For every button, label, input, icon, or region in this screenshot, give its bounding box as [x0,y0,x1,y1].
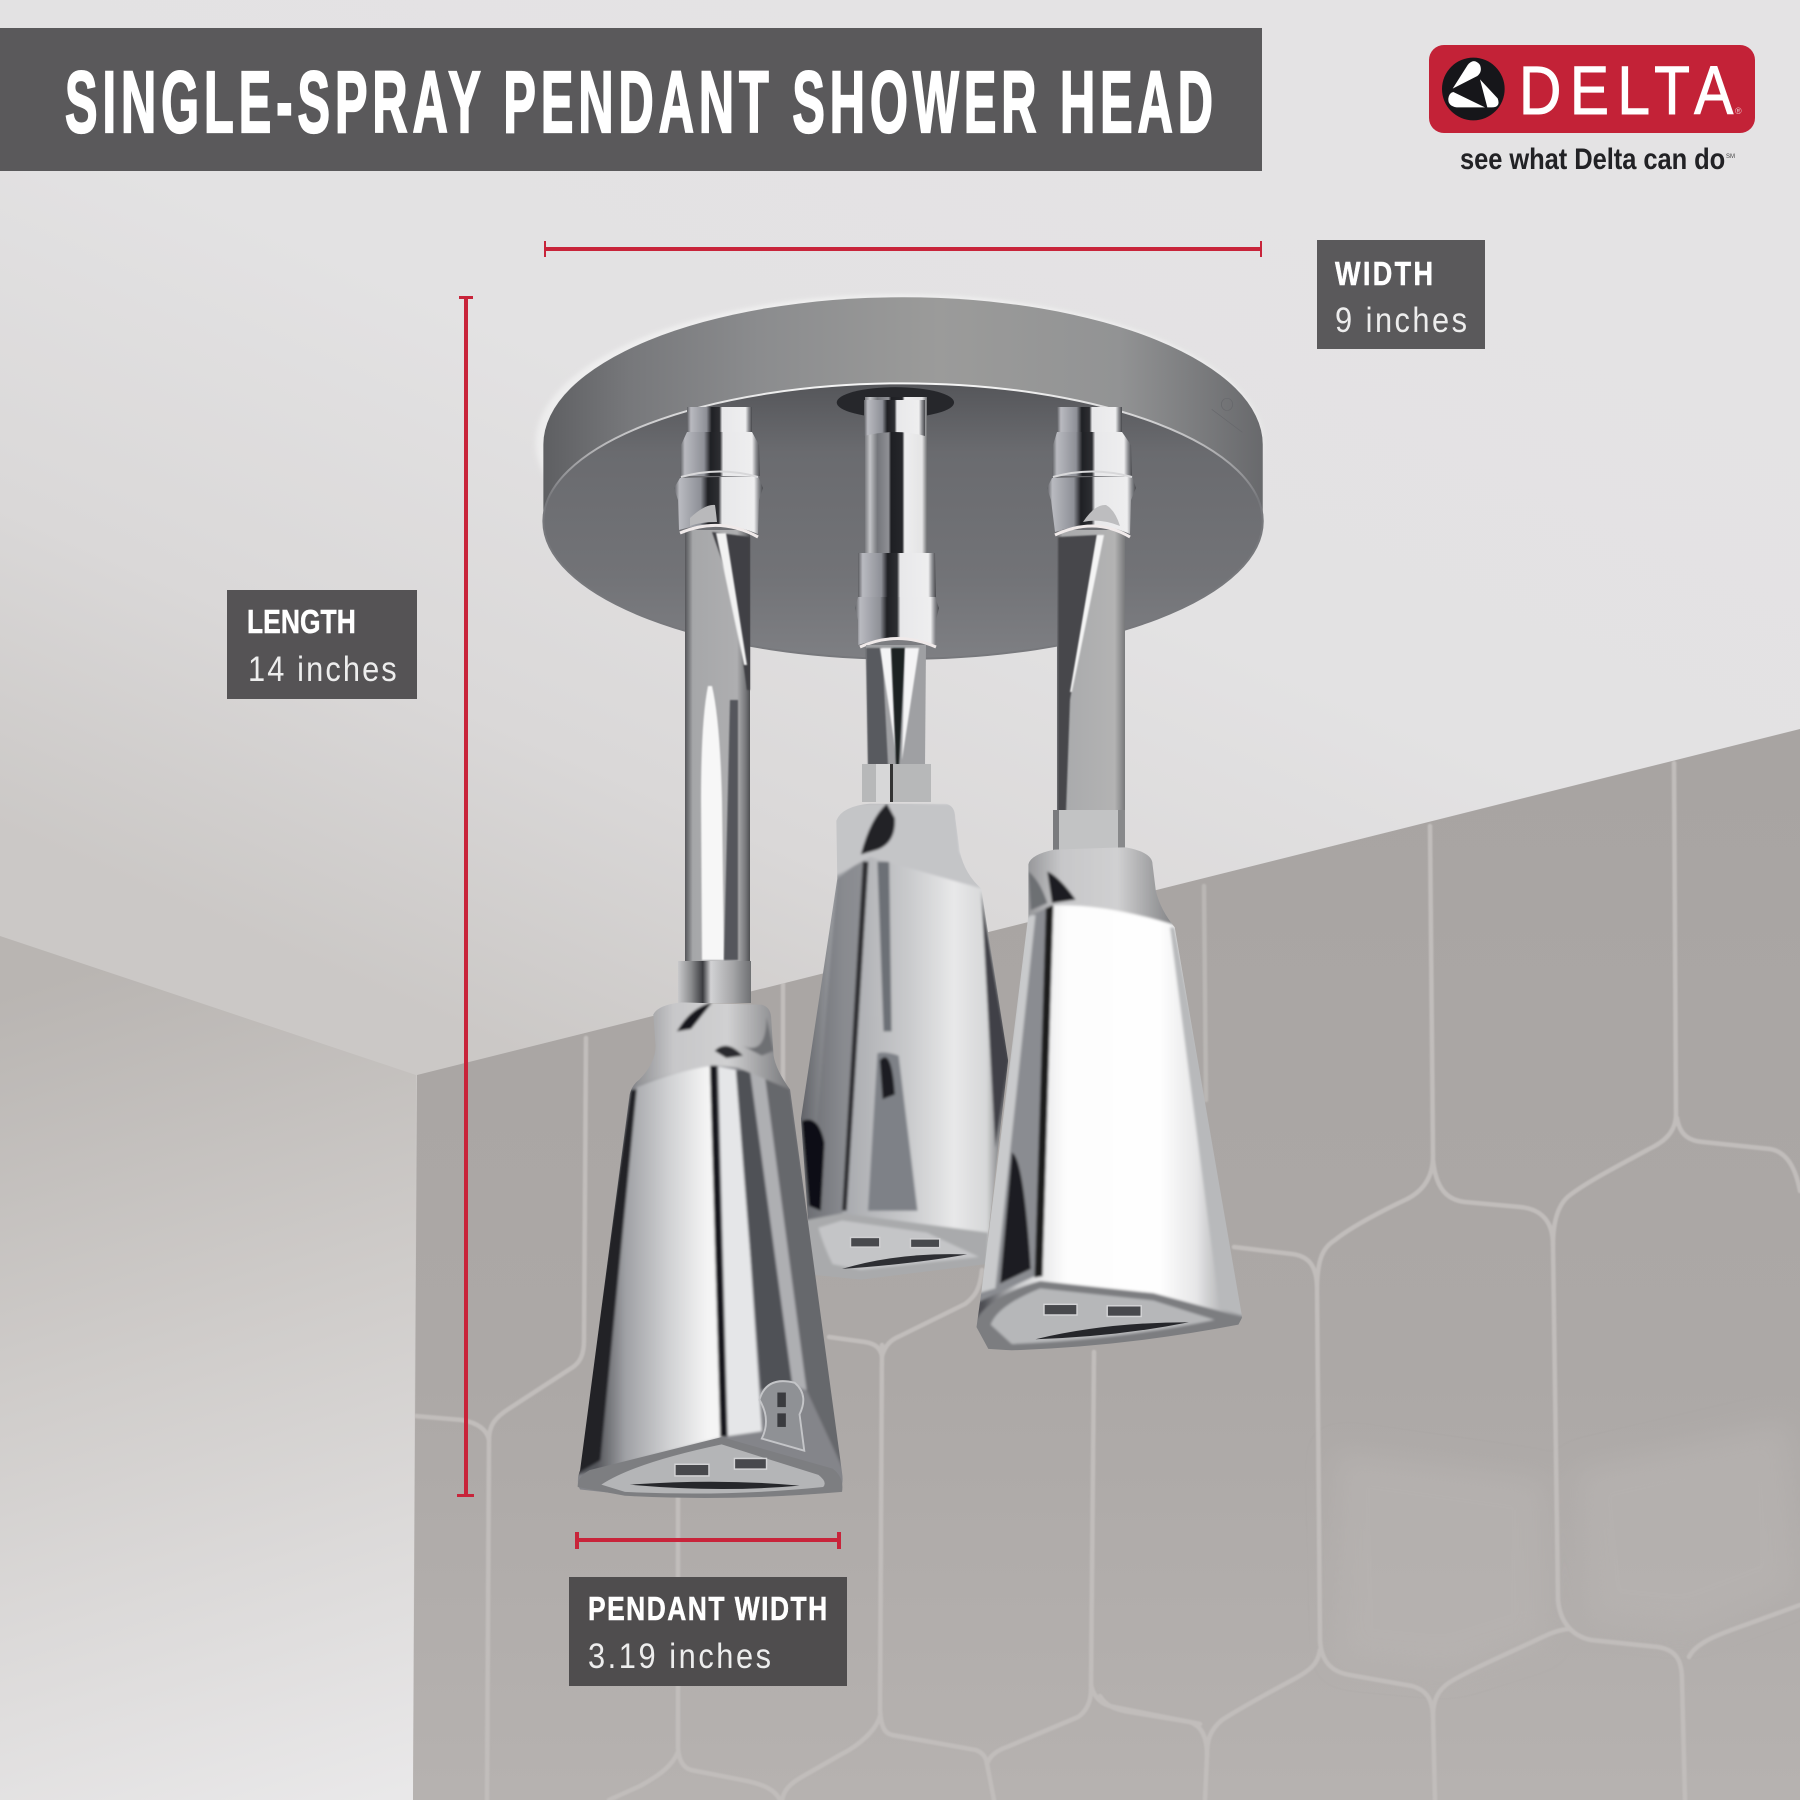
pendant width label: 3.19 inches [588,1636,771,1675]
width dimension line [544,241,1262,257]
canopy maker's mark [1212,398,1242,432]
registered mark: ® [1735,106,1742,116]
length label: 14 inches [248,649,397,688]
wordmark: DELTA [1519,52,1733,129]
nozzles [675,1464,709,1476]
shower head assembly: ceiling canopy, three arms, three pendants [536,294,1263,1502]
left wall [0,936,416,1800]
icon: Delta triangle mark [1442,58,1505,120]
middle nut [862,764,931,802]
centre flange [837,387,954,418]
nozzles [851,1237,880,1247]
tiled right wall [413,729,1800,1800]
left collar [687,407,752,433]
left arm [674,407,763,965]
right nut [1053,810,1125,850]
width label [1317,240,1485,349]
service mark: SM [1726,154,1735,160]
pendant width label [569,1577,847,1686]
side nozzle detail [759,1381,804,1451]
left nut [678,961,751,1003]
pendant width label: PENDANT WIDTH [588,1591,827,1628]
length label: LENGTH [247,604,356,641]
width label: 9 inches [1335,300,1467,339]
underside face [578,1437,842,1498]
right pendant [965,838,1248,1361]
title banner [0,28,1262,171]
nozzles [1044,1304,1077,1315]
middle arm [855,397,939,802]
right arm [1047,407,1136,850]
title text: SINGLE-SPRAY PENDANT SHOWER HEAD [65,53,1213,151]
tagline: see what Delta can do [1460,142,1725,175]
pendant width dimension line [575,1532,841,1549]
left pendant [573,998,847,1502]
ceiling canopy [536,294,1263,659]
width label: WIDTH [1335,257,1433,293]
right collar [1057,407,1122,433]
middle pendant [795,799,1017,1283]
length label [227,590,417,699]
Delta logo [1429,45,1755,175]
length dimension line [457,296,474,1497]
